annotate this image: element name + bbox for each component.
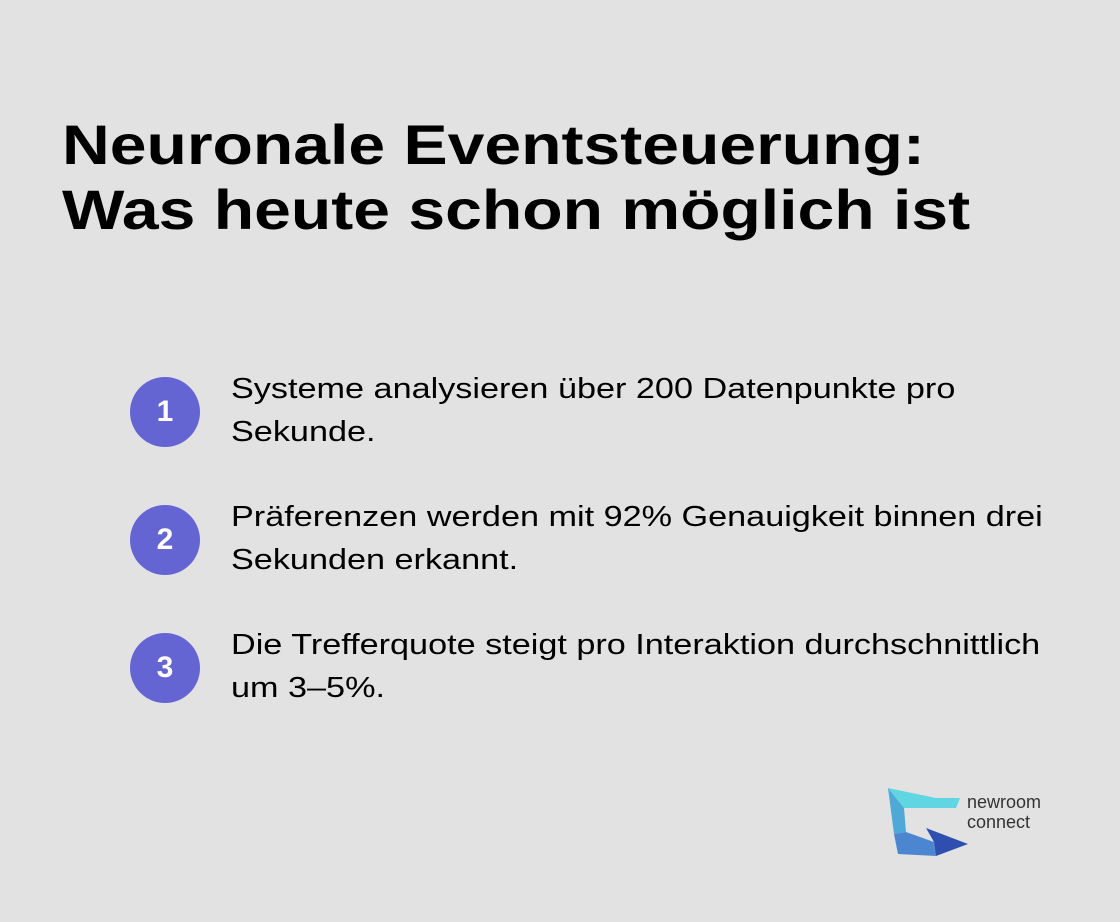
item 2: Sekunden erkannt. [231, 544, 518, 576]
item 3: um 3–5%. [231, 672, 385, 704]
item 1: Sekunde. [231, 416, 376, 448]
logo [888, 788, 1041, 856]
logo: connect [967, 812, 1030, 832]
item 1 [130, 373, 955, 448]
item 2 [130, 501, 1043, 576]
item 1: 1 [157, 395, 173, 428]
logo: newroom [967, 792, 1041, 812]
title: Neuronale Eventsteuerung: [62, 113, 925, 176]
title [62, 113, 970, 241]
item 3 [130, 629, 1040, 704]
item 2: Präferenzen werden mit 92% Genauigkeit binnen drei [231, 501, 1043, 533]
item 1: Systeme analysieren über 200 Datenpunkte pro [231, 373, 955, 405]
item 3: 3 [157, 651, 173, 684]
title: Was heute schon möglich ist [62, 178, 970, 241]
item 2: 2 [157, 523, 173, 556]
item 3: Die Trefferquote steigt pro Interaktion durchschnittlich [231, 629, 1040, 661]
